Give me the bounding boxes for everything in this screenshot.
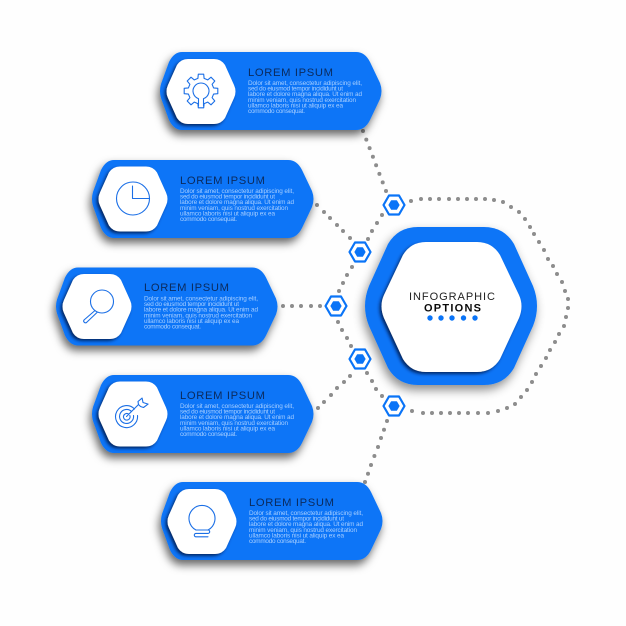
card shape — [92, 160, 314, 238]
body text: ullamco laboris nisi ut aliquip ex ea — [180, 210, 275, 217]
card shape — [160, 52, 382, 130]
body text: labore et dolore magna aliqua. Ut enim ad — [248, 91, 362, 98]
body text: sed do eiusmod tempor incididunt ut — [144, 301, 239, 308]
panel: option 1 — [160, 52, 382, 130]
dotted connector: top card to hex 1 — [361, 129, 388, 193]
dotted connector: third card to hex 3 — [281, 304, 322, 308]
central heading: INFOGRAPHIC — [409, 291, 495, 303]
body text — [249, 510, 363, 545]
body text: sed do eiusmod tempor incididunt ut — [180, 194, 275, 201]
white hexagon — [62, 274, 132, 339]
title: LOREM IPSUM — [180, 390, 265, 402]
title: LOREM IPSUM — [249, 497, 334, 509]
dotted connector: hex 4 to hex 5 — [365, 371, 384, 398]
body text: Dolor sit amet, consectetur adipiscing elit, — [248, 80, 362, 87]
node: hex 3 — [326, 296, 346, 316]
central hexagon blue ring — [365, 227, 537, 385]
body text: ullamco laboris nisi ut aliquip ex ea — [180, 425, 275, 432]
dotted connector: hex 1 to hex 2 — [366, 213, 384, 241]
panel: option 5 — [161, 482, 382, 560]
central dots — [427, 315, 478, 321]
body text — [248, 80, 362, 115]
title: LOREM IPSUM — [144, 282, 229, 294]
body text: sed do eiusmod tempor incididunt ut — [180, 409, 275, 416]
body text: ullamco laboris nisi ut aliquip ex ea — [249, 532, 344, 539]
body text: ullamco laboris nisi ut aliquip ex ea — [248, 102, 343, 109]
node: hex 4 — [350, 350, 370, 368]
node: hex 5 — [384, 396, 404, 416]
body text: minim veniam, quis nostrud exercitation — [249, 527, 357, 534]
dotted connector: fourth card to hex 4 — [316, 374, 352, 410]
body text — [144, 296, 258, 330]
icon: pie chart — [116, 182, 150, 215]
icon: gear — [184, 74, 218, 108]
body text: commodo consequat. — [248, 108, 305, 115]
card shape — [92, 375, 314, 453]
dotted connector: hex 3 to hex 4 — [336, 320, 353, 348]
title: LOREM IPSUM — [248, 67, 333, 79]
panel: central hexagon — [365, 227, 537, 385]
body text: labore et dolore magna aliqua. Ut enim ad — [144, 307, 258, 314]
body text: labore et dolore magna aliqua. Ut enim ad — [180, 414, 294, 421]
panel: option 4 — [92, 375, 314, 453]
panel: option 3 — [56, 268, 278, 346]
dotted connector: hex 5 to bottom card — [363, 419, 389, 484]
white hexagon — [98, 382, 168, 446]
node: hex 1 — [384, 196, 404, 214]
dotted connector: hex 2 to hex 3 — [337, 265, 354, 293]
central hexagon white face — [382, 242, 522, 372]
body text: commodo consequat. — [180, 431, 237, 438]
body text: sed do eiusmod tempor incididunt ut — [249, 516, 344, 523]
icon: target with arrow — [116, 398, 148, 428]
body text: commodo consequat. — [249, 538, 306, 545]
card shape — [56, 268, 278, 346]
white hexagon — [168, 489, 236, 554]
body text: ullamco laboris nisi ut aliquip ex ea — [144, 318, 239, 325]
body text: labore et dolore magna aliqua. Ut enim ad — [249, 521, 363, 528]
white hexagon — [166, 59, 236, 124]
body text: Dolor sit amet, consectetur adipiscing elit, — [144, 296, 258, 302]
icon: magnifier — [84, 290, 114, 323]
body text: minim veniam, quis nostrud exercitation — [248, 97, 356, 104]
white hexagon — [98, 166, 168, 232]
card shape — [161, 482, 382, 560]
body text: Dolor sit amet, consectetur adipiscing elit, — [249, 510, 363, 517]
body text: Dolor sit amet, consectetur adipiscing elit, — [180, 188, 294, 195]
body text: minim veniam, quis nostrud exercitation — [180, 205, 288, 212]
body text: Dolor sit amet, consectetur adipiscing elit, — [180, 403, 294, 410]
body text: minim veniam, quis nostrud exercitation — [180, 420, 288, 427]
body text — [180, 188, 294, 223]
body text — [180, 403, 294, 438]
panel: option 2 — [92, 160, 314, 238]
body text: labore et dolore magna aliqua. Ut enim ad — [180, 199, 294, 206]
dotted connector: second card to hex 2 — [315, 203, 352, 240]
body text: commodo consequat. — [180, 216, 237, 223]
body text: commodo consequat. — [144, 324, 201, 330]
icon: light bulb — [189, 505, 215, 537]
central subheading: OPTIONS — [424, 302, 481, 314]
body text: sed do eiusmod tempor incididunt ut — [248, 86, 343, 93]
title: LOREM IPSUM — [180, 175, 265, 187]
dotted connector: outer hexagon loop — [409, 197, 570, 415]
node: hex 2 — [350, 242, 370, 262]
body text: minim veniam, quis nostrud exercitation — [144, 312, 252, 319]
